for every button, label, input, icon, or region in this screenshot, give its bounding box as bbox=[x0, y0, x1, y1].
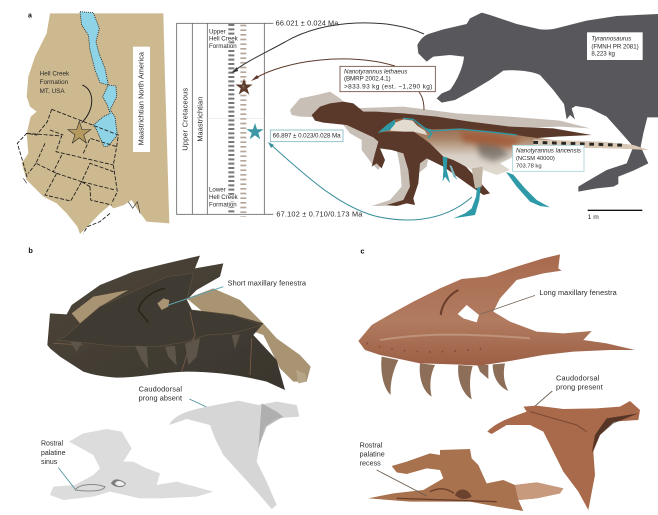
stratigraphic column bbox=[177, 18, 363, 219]
middle date box bbox=[270, 130, 343, 142]
palatine sinus openings bbox=[75, 484, 105, 491]
sinus label: Rostral bbox=[41, 441, 64, 448]
scale bar: 1 m bbox=[588, 214, 599, 221]
brown palatine, left bbox=[368, 449, 563, 511]
period label: Upper Cretaceous bbox=[181, 88, 190, 151]
caudodorsal label: Caudodorsal bbox=[556, 373, 600, 382]
Tyrannosaurus label: 8,223 kg bbox=[591, 51, 616, 58]
leader bbox=[377, 470, 427, 496]
locality label: Formation bbox=[40, 79, 69, 86]
arrow to locality bbox=[82, 85, 92, 123]
caudodorsal label: Caudodorsal bbox=[139, 385, 182, 394]
dark skull block bbox=[47, 256, 285, 390]
star: N. lancensis bbox=[246, 123, 264, 139]
recess label bbox=[360, 442, 385, 468]
sinus label: palatine bbox=[41, 450, 66, 457]
maxilla plate bbox=[57, 273, 262, 347]
fenestra label: Short maxillary fenestra bbox=[228, 278, 307, 287]
N. lethaeus label: >833.93 kg (est. ~1,290 kg) bbox=[344, 83, 432, 90]
leader bbox=[189, 399, 207, 407]
short maxillary fenestra bbox=[157, 298, 169, 310]
head colouring bbox=[390, 119, 427, 135]
Tyrannosaurus silhouette bbox=[417, 13, 658, 221]
rust patterning bbox=[460, 132, 523, 148]
caudodorsal label: prong absent bbox=[139, 393, 182, 402]
arrow: N. lethaeus to star bbox=[254, 59, 395, 79]
panel letter c: c bbox=[360, 247, 364, 256]
lower formation label: Formation bbox=[209, 201, 237, 208]
brown silhouette bbox=[312, 102, 592, 206]
teal back line bbox=[403, 118, 517, 135]
rock matrix bbox=[187, 288, 311, 382]
fenestra label: Long maxillary fenestra bbox=[539, 288, 618, 297]
upper formation label: Hell Creek bbox=[209, 36, 239, 43]
caudodorsal label: prong present bbox=[556, 382, 603, 391]
caudodorsal label bbox=[556, 373, 603, 391]
panel letter a: a bbox=[28, 12, 32, 19]
coastline detail bbox=[23, 178, 140, 213]
upper formation label: Upper bbox=[209, 28, 226, 35]
Tyrannosaurus label: (FMNH PR 2081) bbox=[591, 43, 639, 50]
top date: 66.021 ± 0.024 Ma bbox=[276, 18, 339, 27]
N. lethaeus label: (BMRP 2002.4.1) bbox=[344, 76, 391, 83]
vertical map title box bbox=[133, 47, 150, 152]
fenestra leader bbox=[480, 295, 535, 314]
rear snout edge bbox=[296, 370, 307, 383]
state boundaries bbox=[17, 109, 118, 233]
N. lancensis label bbox=[513, 145, 584, 171]
landmass bbox=[22, 13, 169, 234]
recess label: recess bbox=[360, 460, 381, 468]
brown palatine, right bbox=[487, 401, 640, 510]
N. lethaeus label: Nanotyrannus lethaeus bbox=[344, 68, 407, 75]
long maxillary fenestra bbox=[458, 305, 479, 322]
bottom date: 67.102 ± 0.710/0.173 Ma bbox=[276, 210, 363, 219]
grey palatine, right bbox=[169, 401, 299, 509]
arrow: Tyrannosaurus to column bbox=[233, 23, 424, 72]
maxilla bbox=[358, 254, 635, 366]
hind leg, rear bbox=[506, 172, 550, 207]
recess label: Rostral bbox=[360, 442, 383, 450]
N. lancensis label: 703.78 kg bbox=[516, 163, 542, 169]
arrow: N. lancensis to date bbox=[270, 144, 472, 220]
cracks bbox=[53, 312, 252, 375]
sinus label: sinus bbox=[41, 459, 58, 466]
teeth bbox=[381, 357, 508, 399]
lower formation label: Hell Creek bbox=[209, 194, 239, 201]
middle date box: 66.897 ± 0.023/0.028 Ma bbox=[273, 133, 341, 140]
Tyrannosaurus label bbox=[587, 32, 643, 60]
recess label: palatine bbox=[360, 451, 385, 459]
lower formation label bbox=[209, 187, 239, 208]
grey lithology column bbox=[222, 24, 240, 213]
sinus label bbox=[41, 441, 66, 466]
locality label: Hell Creek bbox=[40, 70, 70, 77]
N. lancensis reconstruction bbox=[378, 118, 648, 218]
hind leg, front bbox=[453, 185, 481, 218]
upper formation label: Formation bbox=[209, 43, 237, 50]
leader bbox=[532, 391, 552, 408]
arrows between dates and specimens bbox=[231, 23, 472, 220]
star: Hell Creek locality bbox=[68, 121, 91, 143]
teeth bbox=[70, 334, 240, 369]
N. lethaeus label bbox=[340, 66, 435, 92]
fenestra leader bbox=[168, 287, 223, 305]
stage label: Maastrichtian bbox=[196, 97, 205, 142]
upper formation label bbox=[209, 28, 239, 50]
caudodorsal label bbox=[139, 385, 182, 402]
star: N. lethaeus: ? bbox=[242, 85, 245, 90]
N. lancensis label: (NCSM 40000) bbox=[516, 156, 555, 162]
Western Interior Seaway bbox=[80, 12, 117, 147]
panel c: T. rex fossils bbox=[358, 247, 640, 511]
tail stripes bbox=[533, 139, 648, 150]
leader bbox=[58, 468, 75, 489]
locality label: MT, USA bbox=[40, 88, 65, 95]
grey palatine, left bbox=[50, 429, 213, 500]
scale bar bbox=[588, 210, 642, 221]
lower formation label: Lower bbox=[209, 187, 226, 194]
near foreleg bbox=[443, 157, 450, 183]
locality label bbox=[40, 70, 70, 95]
foramina bbox=[367, 343, 483, 352]
brown lithology column bbox=[234, 25, 252, 217]
panel b: N. lancensis fossils bbox=[28, 246, 311, 509]
panel letter b: b bbox=[28, 246, 33, 255]
vertical map title box: Maastrichtian North America bbox=[137, 51, 146, 145]
star: N. lethaeus bbox=[235, 78, 253, 95]
panel a: map of Maastrichtian North America bbox=[17, 12, 169, 234]
leader: lethaeus box to body bbox=[419, 92, 424, 110]
Nanotyrannus silhouettes and reconstruction bbox=[290, 92, 648, 218]
N. lancensis label: Nanotyrannus lancensis bbox=[516, 148, 581, 155]
grey silhouette bbox=[290, 92, 590, 206]
Tyrannosaurus label: Tyrannosaurus bbox=[591, 36, 631, 43]
exposed matrix patch bbox=[72, 290, 128, 323]
